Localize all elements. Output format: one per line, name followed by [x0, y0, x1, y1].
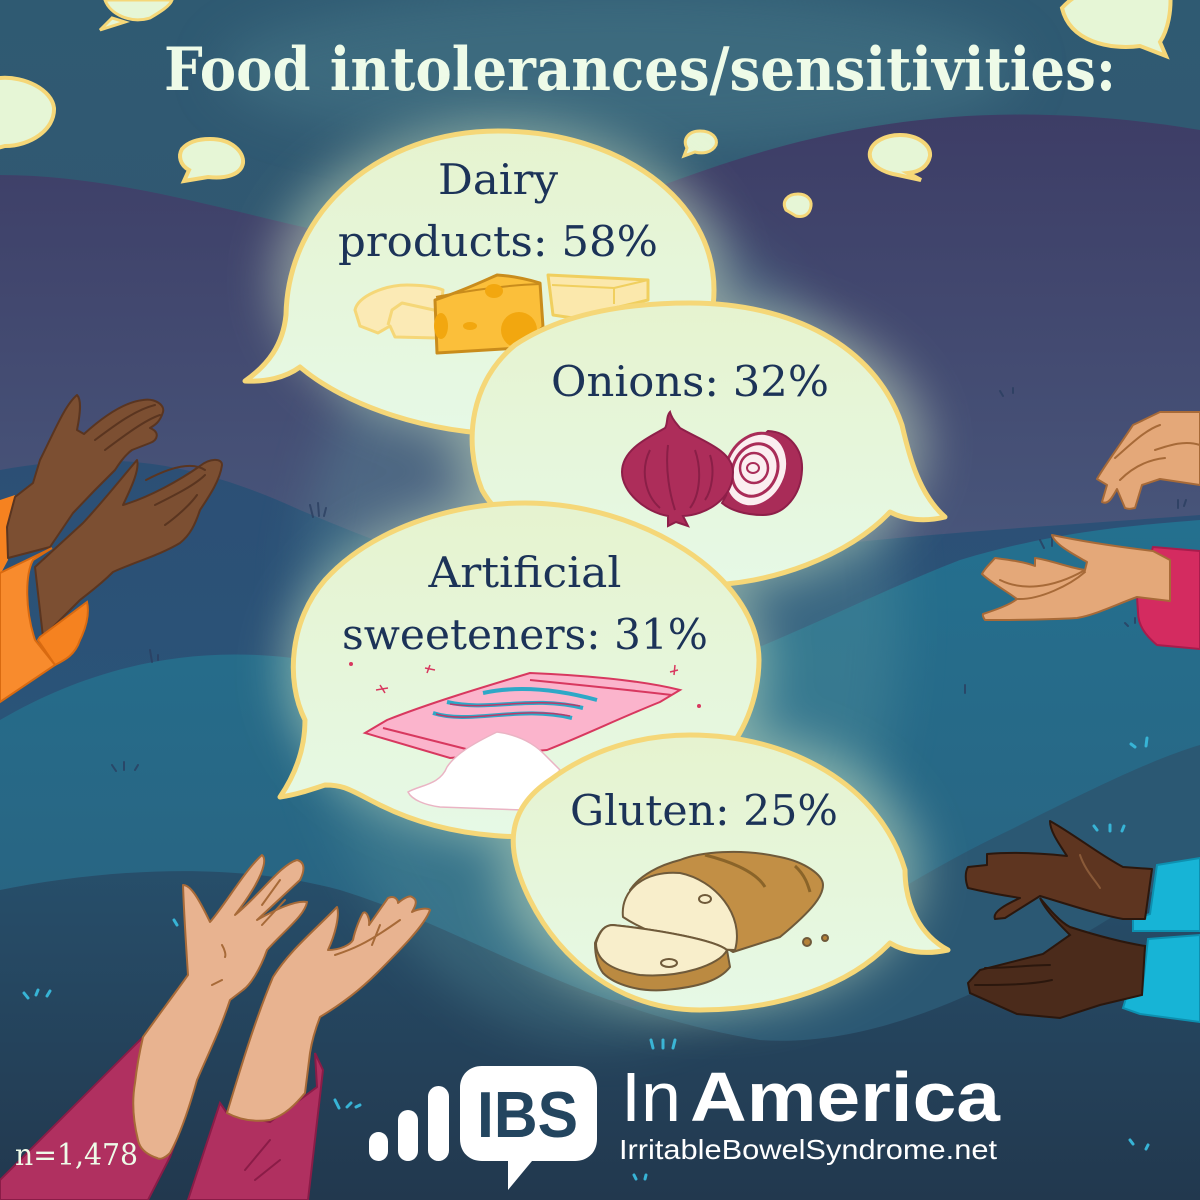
title: Food intolerances/sensitivities: [164, 35, 1116, 105]
panel: dairy products bubble [245, 131, 714, 434]
icon: sweetener packet [349, 662, 701, 810]
label: onions: Onions: 32% [551, 357, 829, 406]
heading: artificial sweeteners: Artificial [427, 548, 622, 597]
speech bubble glow [275, 125, 925, 1010]
icon: signal bars [369, 1086, 449, 1161]
blue grass marks [24, 738, 1148, 1179]
small floating speech bubbles [0, 0, 1171, 217]
icon: left upper hands with orange sleeves [0, 395, 222, 702]
wordmark: In [621, 1058, 681, 1136]
website: IrritableBowelSyndrome.net [619, 1134, 997, 1165]
panel: gluten bubble [513, 735, 948, 1010]
icon: red onions [622, 412, 802, 526]
sample size note: n=1,478 [15, 1138, 138, 1173]
heading: artificial sweeteners: sweeteners: 31% [342, 610, 708, 659]
icon: cheese [355, 275, 648, 353]
icon: right middle hand with pink sleeve [982, 535, 1200, 649]
icon: bread loaf [595, 852, 828, 990]
icon: right lower hands with blue sleeves [966, 821, 1200, 1022]
icon: right upper hand [1097, 412, 1200, 509]
panel: artificial sweeteners bubble [280, 503, 759, 837]
heading: dairy products [338, 155, 658, 266]
heading: artificial sweeteners [342, 548, 708, 659]
logo: IBS In America [369, 1058, 1001, 1190]
heading: dairy products: products: 58% [338, 217, 658, 266]
panel: onions bubble [472, 303, 945, 585]
icon: IBS speech bubble: IBS [477, 1078, 578, 1151]
grass marks [112, 388, 1186, 771]
wordmark bold: America [690, 1058, 1001, 1136]
icon: bottom left hands with magenta sleeves [0, 855, 430, 1200]
icon: IBS speech bubble [460, 1066, 597, 1190]
heading: dairy products: Dairy [438, 155, 558, 204]
label: gluten: Gluten: 25% [570, 786, 838, 835]
